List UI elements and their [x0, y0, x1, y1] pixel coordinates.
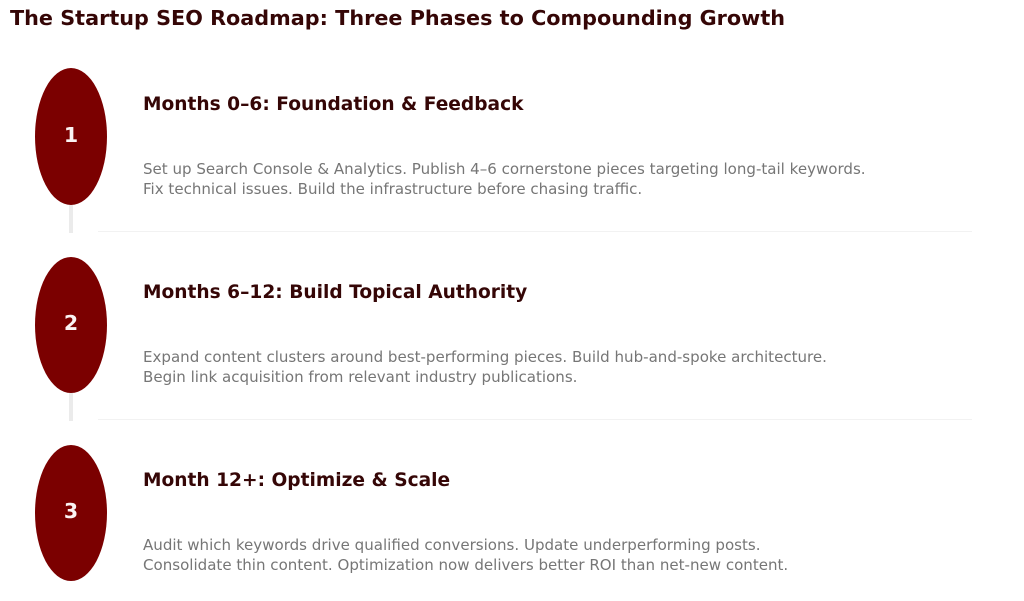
phase 1 description: Fix technical issues. Build the infrastructure before chasing traffic. [143, 180, 642, 198]
phase 3 badge: 3 [64, 499, 78, 523]
connector line 1 [69, 205, 73, 233]
phase 3 description: Consolidate thin content. Optimization now delivers better ROI than net-new content. [143, 556, 788, 574]
title: The Startup SEO Roadmap: Three Phases to Compounding Growth [10, 6, 785, 30]
phase 2 badge [35, 257, 107, 393]
phase 1 description [143, 160, 866, 198]
phase 3 heading: Month 12+: Optimize & Scale [143, 470, 450, 491]
phase 2 badge: 2 [64, 311, 78, 335]
phase 3 description: Audit which keywords drive qualified conversions. Update underperforming posts. [143, 536, 761, 554]
phase 1 heading: Months 0–6: Foundation & Feedback [143, 94, 523, 115]
connector line 2 [69, 393, 73, 421]
phase 2 description: Begin link acquisition from relevant industry publications. [143, 368, 577, 386]
phase 1 badge [35, 68, 107, 205]
phase 2 heading: Months 6–12: Build Topical Authority [143, 282, 527, 303]
phase 1 description: Set up Search Console & Analytics. Publish 4–6 cornerstone pieces targeting long-tail keywords. [143, 160, 866, 178]
phase 2 description [143, 348, 827, 386]
phase 2 description: Expand content clusters around best-performing pieces. Build hub-and-spoke architecture. [143, 348, 827, 366]
phase 3 description [143, 536, 788, 574]
phase 1 badge: 1 [64, 123, 78, 147]
phase 3 badge [35, 445, 107, 581]
